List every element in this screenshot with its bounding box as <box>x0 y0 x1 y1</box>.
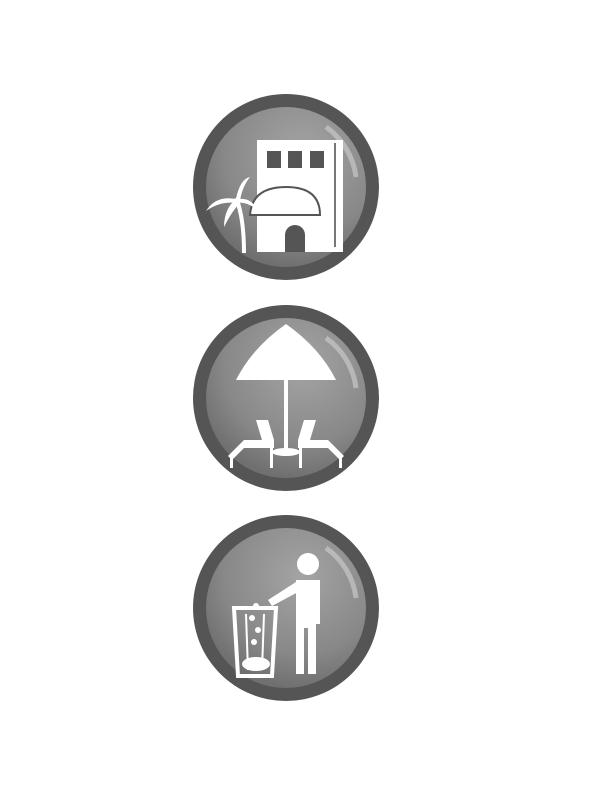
icon: hotel with palm tree <box>193 94 379 280</box>
icon: person throwing litter in bin <box>193 515 379 701</box>
icon: beach umbrella with loungers <box>193 305 379 491</box>
